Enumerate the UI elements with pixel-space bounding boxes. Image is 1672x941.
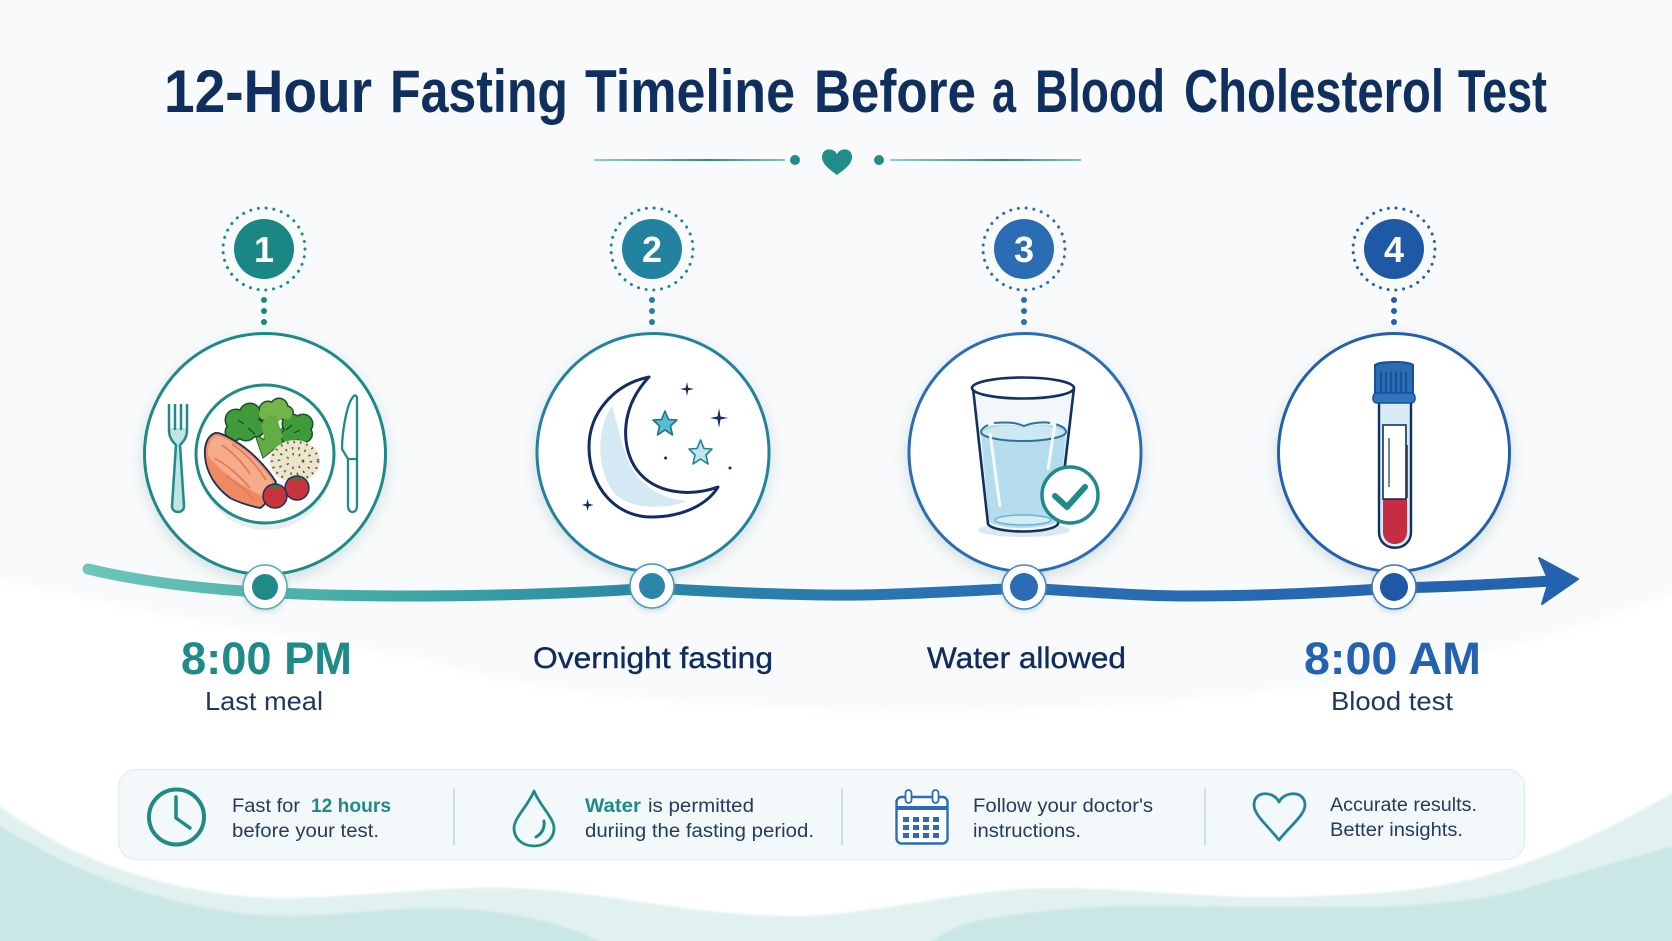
icon circle 4: blood test	[1278, 334, 1510, 572]
label: Overnight fasting: Overnight fasting	[533, 642, 773, 675]
icon: knife	[342, 396, 357, 512]
timeline node 3	[1002, 565, 1046, 609]
icon circle 2: overnight fasting	[537, 334, 769, 572]
tip: water permitted: Water	[585, 796, 642, 817]
icon: check badge	[1042, 467, 1098, 523]
title: Blood	[1035, 58, 1165, 125]
icon: heart outline	[1254, 794, 1305, 840]
title: Fasting	[390, 58, 568, 125]
icon: plate of food	[196, 385, 334, 530]
icon: glass of water	[972, 378, 1074, 537]
timeline arrow	[88, 558, 1578, 604]
step 1 number badge	[223, 208, 305, 325]
title: Timeline	[585, 58, 795, 125]
icon: water drop	[514, 791, 554, 846]
icon: fork	[169, 404, 187, 512]
label: Last meal: Last meal	[205, 686, 323, 716]
tip: water permitted	[585, 796, 814, 842]
title	[164, 58, 1547, 125]
title: Test	[1458, 58, 1547, 125]
title: Before	[814, 58, 976, 125]
step 2 number badge: 2	[642, 229, 662, 270]
step 4 number badge: 4	[1384, 229, 1404, 270]
step 3 number badge: 3	[1014, 229, 1034, 270]
tip: follow doctor's instructions: Follow your doctor's	[973, 796, 1153, 817]
broccoli	[226, 399, 312, 458]
tip: fast for 12 hours: Fast for	[232, 796, 301, 817]
label: Blood test: Blood test	[1331, 686, 1454, 716]
tip: accurate results	[1330, 795, 1477, 841]
label: 8:00 AM: 8:00 AM	[1304, 633, 1481, 684]
icon: clock	[149, 790, 204, 844]
tip: fast for 12 hours: 12 hours	[311, 796, 391, 817]
tip: fast for 12 hours: before your test.	[232, 821, 379, 842]
tip: accurate results: Better insights.	[1330, 820, 1463, 841]
title: a	[992, 58, 1016, 125]
title: 12-Hour	[164, 58, 372, 125]
icon: stars	[582, 382, 732, 511]
salmon	[205, 433, 276, 508]
icon circle 3: water allowed	[909, 334, 1141, 572]
step 4 number badge	[1353, 208, 1435, 325]
rice	[270, 440, 320, 482]
timeline node 4	[1372, 565, 1416, 609]
tip: water permitted: duriing the fasting period.	[585, 821, 814, 842]
icon: blood tube	[1373, 362, 1415, 548]
icon: calendar	[896, 790, 948, 844]
tip: water permitted: is permitted	[648, 796, 754, 817]
label: Water allowed: Water allowed	[927, 642, 1126, 675]
icon circle 1: last meal	[144, 334, 386, 574]
icon: crescent moon	[589, 377, 718, 517]
tomatoes	[263, 476, 309, 508]
panel: tips strip	[118, 770, 1524, 860]
heart divider	[594, 149, 1081, 175]
step 1 number badge: 1	[254, 229, 274, 270]
timeline node 2	[630, 564, 674, 608]
step 3 number badge	[983, 208, 1065, 325]
tip: follow doctor's instructions	[973, 796, 1153, 842]
tip: fast for 12 hours	[232, 796, 391, 842]
tip: accurate results: Accurate results.	[1330, 795, 1477, 816]
step 2 number badge	[611, 208, 693, 325]
timeline node 1	[243, 565, 287, 609]
label: 8:00 PM: 8:00 PM	[181, 633, 352, 684]
title: Cholesterol	[1184, 58, 1444, 125]
tip: follow doctor's instructions: instructions.	[973, 821, 1081, 842]
